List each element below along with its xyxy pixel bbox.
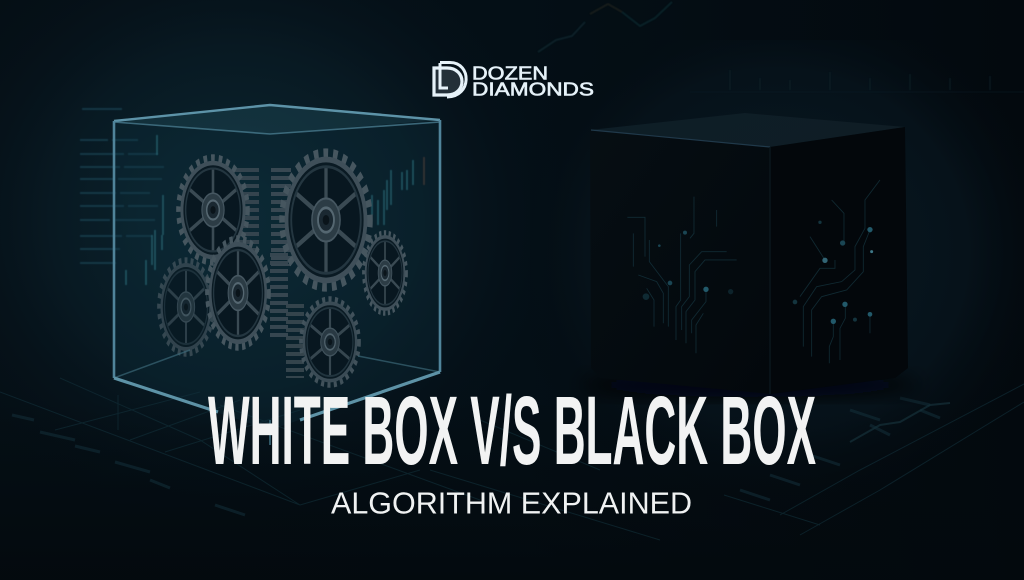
gear: large [281, 153, 370, 287]
gear: bottom centre [295, 299, 359, 385]
black box: dark cube with circuits [580, 113, 920, 397]
circuit traces [627, 180, 880, 363]
glass edges [114, 105, 440, 445]
logo wordmark: DOZEN [472, 62, 548, 84]
subtitle: ALGORITHM EXPLAINED [331, 486, 692, 520]
chart line near lower right [850, 403, 950, 442]
logo icon [434, 62, 466, 97]
candles inside the glass box [126, 135, 424, 285]
faint stock chart at top [538, 2, 1024, 92]
floor grid [0, 378, 1024, 540]
cube top face [590, 113, 905, 147]
logo: Dozen Diamonds [434, 62, 594, 100]
cube left face [590, 130, 771, 394]
glass back faces [114, 105, 440, 430]
gear: back left bottom [159, 260, 213, 354]
floor data marks [12, 398, 940, 515]
white box: glass cube with gears [114, 105, 440, 445]
cube right face [770, 127, 908, 394]
gear: centre left [207, 239, 279, 347]
cube shadow [580, 373, 920, 397]
logo wordmark: DIAMONDS [472, 78, 594, 100]
gear: small right [364, 233, 406, 313]
data columns behind glass box [80, 108, 164, 264]
logo wordmark [472, 62, 594, 100]
gear: back top-left [179, 158, 247, 262]
